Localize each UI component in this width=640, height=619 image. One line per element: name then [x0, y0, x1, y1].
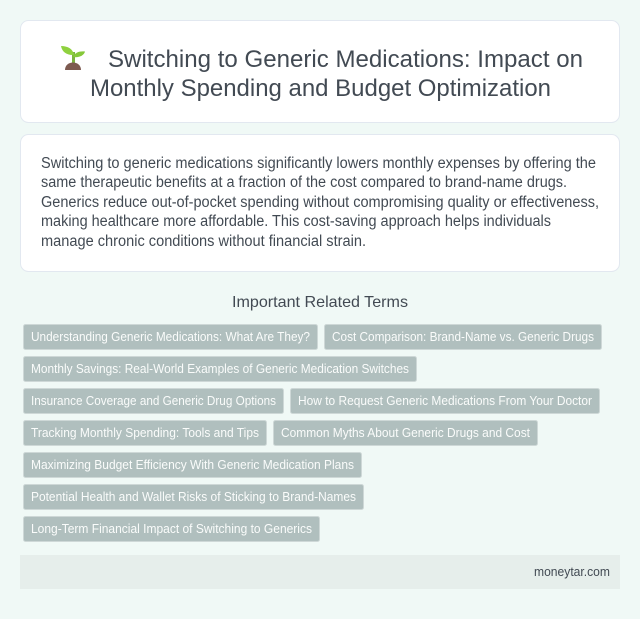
tag — [324, 324, 602, 350]
tag — [290, 388, 600, 414]
tag: Maximizing Budget Efficiency With Generic Medication Plans — [31, 458, 354, 472]
tag — [24, 420, 266, 446]
panel: title card — [20, 20, 620, 122]
tag — [24, 484, 364, 510]
text block: summary: manage chronic conditions without financial strain. — [41, 233, 366, 250]
related terms tags — [24, 324, 602, 542]
heading: important related terms: Important Related Terms — [232, 294, 408, 311]
text block: summary: Generics reduce out-of-pocket spending without compromising quality or effectiveness, — [41, 194, 599, 211]
tag: Common Myths About Generic Drugs and Cost — [281, 426, 531, 440]
tag: Understanding Generic Medications: What Are They? — [31, 330, 310, 344]
tag: Long-Term Financial Impact of Switching to Generics — [31, 522, 312, 536]
text block: summary: making healthcare more affordable. This cost-saving approach helps individuals — [41, 213, 551, 230]
title — [90, 46, 583, 102]
tag: How to Request Generic Medications From Your Doctor — [298, 394, 592, 408]
tag — [24, 516, 320, 542]
icon: seedling — [61, 46, 85, 70]
title: Switching to Generic Medications: Impact on — [108, 46, 583, 73]
tag — [24, 452, 362, 478]
tag: Insurance Coverage and Generic Drug Options — [31, 394, 276, 408]
text block: summary — [41, 155, 599, 250]
tag: Cost Comparison: Brand-Name vs. Generic Drugs — [332, 330, 594, 344]
tag — [24, 388, 284, 414]
tag: Monthly Savings: Real-World Examples of Generic Medication Switches — [31, 362, 409, 376]
tag — [274, 420, 538, 446]
tag: Potential Health and Wallet Risks of Sticking to Brand-Names — [31, 490, 356, 504]
text block: summary: same therapeutic benefits at a fraction of the cost compared to brand-name drugs. — [41, 174, 567, 191]
title: Monthly Spending and Budget Optimization — [90, 75, 551, 102]
tag — [24, 356, 416, 382]
text block: summary: Switching to generic medications significantly lowers monthly expenses by offering the — [41, 155, 596, 172]
footer: source: moneytar.com — [534, 565, 610, 579]
tag: Tracking Monthly Spending: Tools and Tips — [31, 426, 259, 440]
panel: summary card — [20, 134, 620, 272]
tag — [24, 324, 318, 350]
footer bar — [20, 555, 620, 589]
